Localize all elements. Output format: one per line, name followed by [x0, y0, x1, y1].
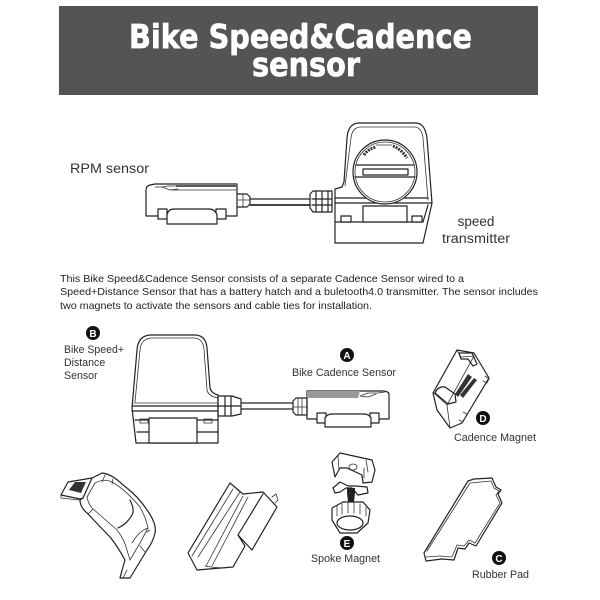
badge B with label: Bike Speed+Distance Sensor: Sensor [64, 370, 98, 382]
badge A with label: Bike Cadence Sensor: Bike Cadence Sensor [292, 367, 396, 379]
illustration: rubber pad [424, 478, 502, 561]
badge C with label: Rubber Pad: C [495, 554, 503, 565]
badge B with label: Bike Speed+Distance Sensor: Distance [64, 357, 105, 369]
badge B with label: Bike Speed+Distance Sensor: Bike Speed+ [64, 344, 124, 356]
badge E with label: Spoke Magnet [311, 536, 380, 565]
illustration: RPM sensor wired to speed transmitter [146, 123, 432, 243]
badge A with label: Bike Cadence Sensor [292, 348, 396, 379]
badge D with label: Cadence Magnet: Cadence Magnet [454, 432, 536, 444]
title banner: Bike Speed&Cadence [129, 17, 472, 56]
illustration: Bike Speed+Distance sensor with cadence sensor [132, 335, 389, 443]
description text: This Bike Speed&Cadence Sensor consists of a separate Cadence Sensor wired to a [60, 274, 464, 285]
title banner: sensor [252, 45, 361, 84]
illustration: spoke magnet [332, 453, 375, 533]
label: speed transmitter: transmitter [442, 231, 511, 246]
badge B with label: Bike Speed+Distance Sensor: B [89, 329, 97, 340]
badge B with label: Bike Speed+Distance Sensor [64, 326, 124, 382]
illustration: sensor mount [188, 483, 278, 570]
badge E with label: Spoke Magnet: E [344, 539, 351, 550]
badge D with label: Cadence Magnet [454, 411, 536, 444]
description text: two magnets to activate the sensors and cable ties for installation. [60, 301, 372, 312]
label: RPM sensor: RPM sensor [70, 160, 149, 176]
badge A with label: Bike Cadence Sensor: A [343, 351, 351, 362]
badge C with label: Rubber Pad [472, 551, 529, 581]
badge C with label: Rubber Pad: Rubber Pad [472, 569, 529, 581]
description text: Speed+Distance Sensor that has a battery hatch and a buletooth4.0 transmitter. The sensor includes [60, 287, 538, 298]
title banner [59, 6, 538, 95]
illustration: cadence magnet [433, 350, 489, 428]
label: speed transmitter [442, 214, 511, 246]
badge D with label: Cadence Magnet: D [479, 414, 487, 425]
description text [60, 274, 538, 312]
badge E with label: Spoke Magnet: Spoke Magnet [311, 553, 380, 565]
label: speed transmitter: speed [458, 214, 494, 229]
illustration: rubber strap [61, 473, 155, 578]
